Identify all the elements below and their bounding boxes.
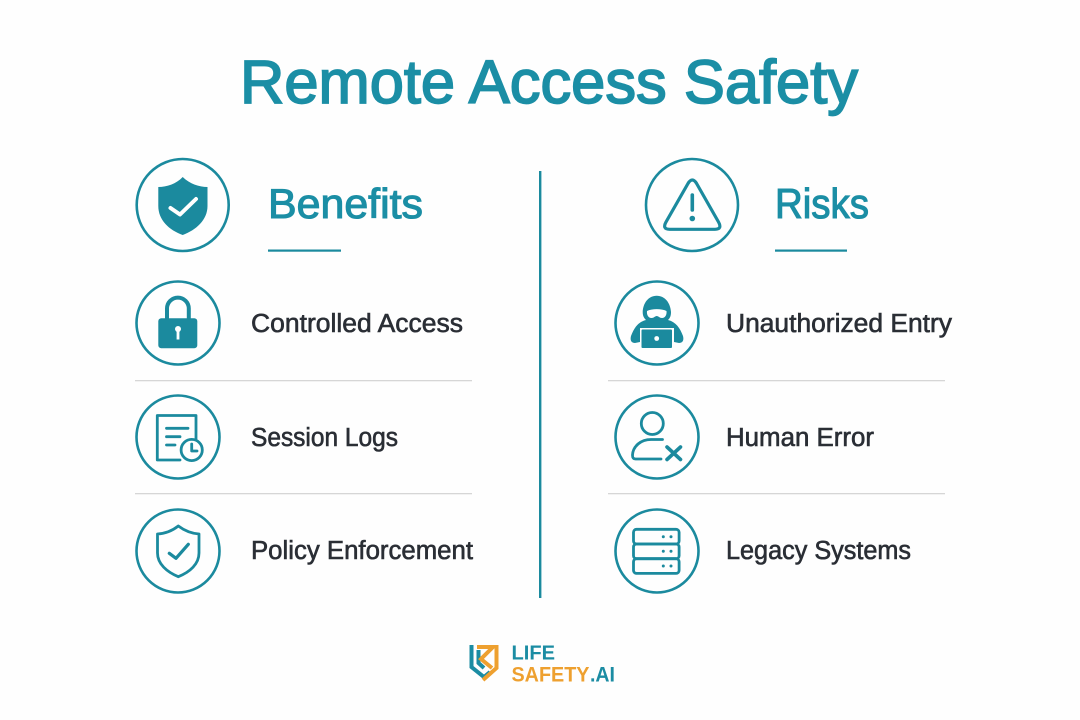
- item: unauthorized entry: [616, 282, 952, 364]
- icon: warning triangle: [646, 159, 738, 251]
- label: Session Logs: [251, 424, 398, 452]
- logo text: life: LIFE: [512, 642, 555, 664]
- icon: document with clock: [136, 396, 220, 478]
- heading underline: [775, 250, 847, 252]
- logo mark: shield: [472, 645, 496, 680]
- label: Policy Enforcement: [251, 537, 473, 565]
- heading: benefits: Benefits: [268, 180, 423, 227]
- logo text: .ai: .AI: [590, 663, 615, 687]
- title: Remote Access Safety: [240, 48, 858, 116]
- center divider: [539, 171, 541, 598]
- icon: server stack: [616, 510, 698, 592]
- panel: benefits: [136, 159, 473, 592]
- item: human error: [616, 396, 875, 478]
- panel: risks: [616, 159, 952, 592]
- icon: hooded hacker with laptop: [616, 282, 698, 364]
- logo text: safety: SAFETY: [512, 663, 590, 687]
- label: Unauthorized Entry: [726, 310, 952, 338]
- icon: user with x: [616, 396, 698, 478]
- icon: outline shield with check: [136, 510, 220, 592]
- icon: padlock: [136, 282, 220, 364]
- item: controlled access: [136, 282, 463, 364]
- heading: risks: Risks: [775, 180, 869, 227]
- label: Human Error: [726, 424, 875, 452]
- item: legacy systems: [616, 510, 911, 592]
- icon: filled shield with check: [137, 159, 229, 251]
- label: Legacy Systems: [726, 537, 911, 565]
- item: session logs: [136, 396, 398, 478]
- item: policy enforcement: [136, 510, 473, 592]
- logo: [472, 642, 615, 687]
- label: Controlled Access: [251, 310, 463, 338]
- heading underline: [268, 250, 341, 252]
